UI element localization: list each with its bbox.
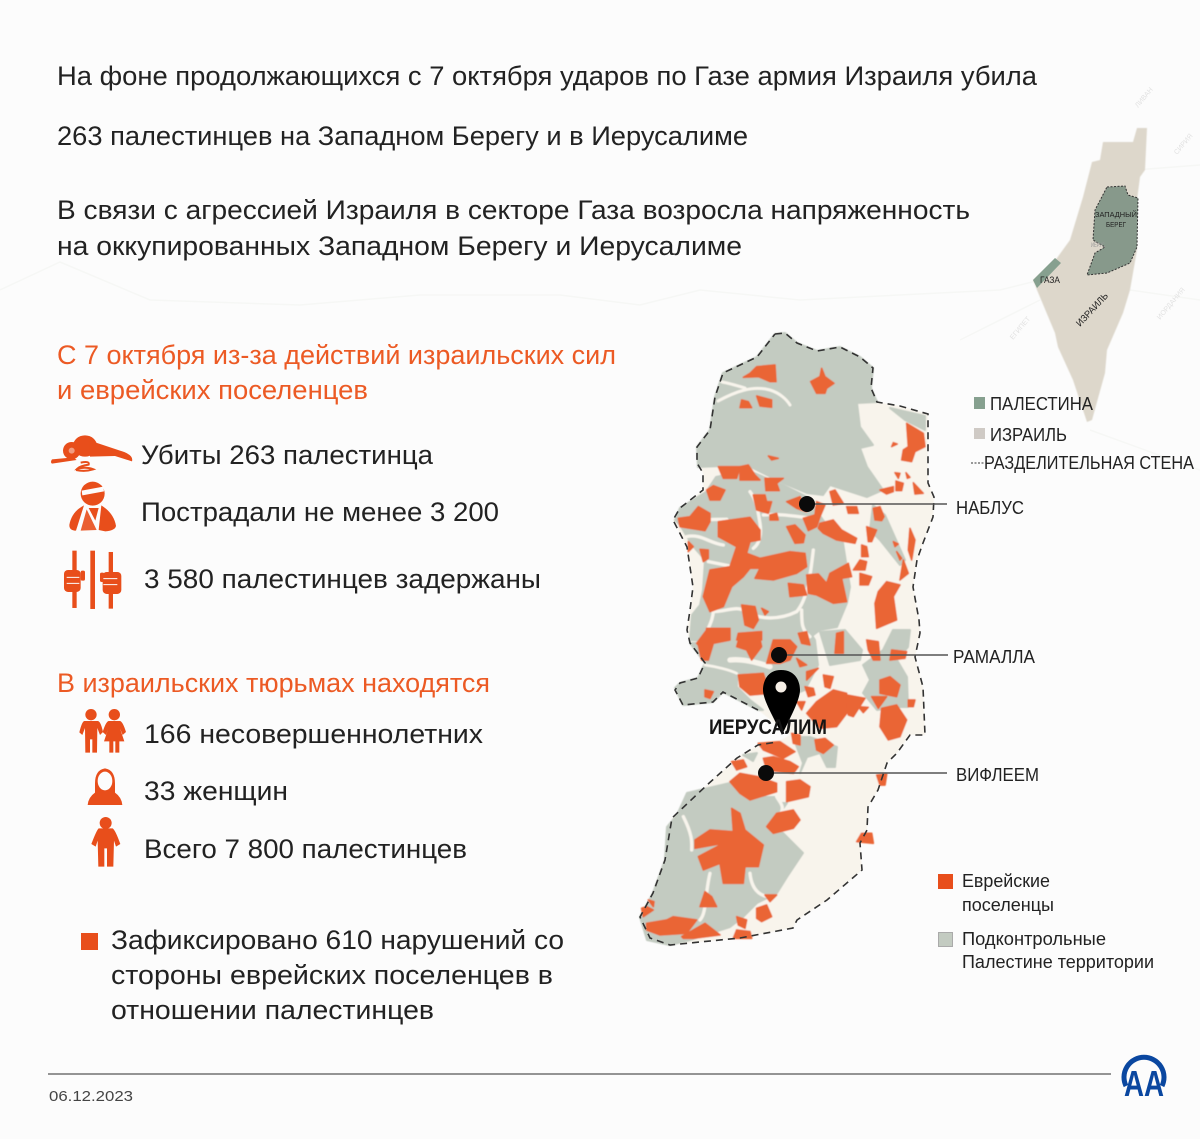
note: settler violations bbox=[81, 925, 564, 1025]
locator map: Israel and Palestine: ГАЗА bbox=[1040, 275, 1060, 285]
legend: settlements: поселенцы bbox=[962, 895, 1054, 915]
map: West Bank bbox=[640, 333, 934, 945]
faint neighbour labels: СИРИЯ bbox=[1173, 133, 1195, 156]
icon: body on the ground bbox=[51, 435, 132, 471]
Israeli settlements: north (coordinates from crop) bbox=[678, 365, 925, 640]
legend: controlled territories: Подконтрольные bbox=[962, 929, 1106, 949]
legend: controlled territories: Палестине территории bbox=[962, 952, 1154, 972]
legend: locator map: ПАЛЕСТИНА bbox=[990, 394, 1093, 414]
legend: controlled territories bbox=[938, 929, 1154, 972]
legend: locator map bbox=[971, 394, 1194, 473]
title bbox=[57, 61, 1038, 151]
legend: settlements: Еврейские bbox=[962, 871, 1050, 891]
intro text: В связи с агрессией Израиля в секторе Газа возросла напряженность bbox=[57, 195, 970, 225]
stat: minors: 166 несовершеннолетних bbox=[144, 719, 484, 749]
icon: woman in headscarf bbox=[88, 768, 122, 805]
title: 263 палестинцев на Западном Берегу и в Иерусалиме bbox=[57, 121, 748, 151]
locator map: Israel and Palestine: ИЗРАИЛЬ bbox=[1074, 291, 1111, 329]
locator map: Israel and Palestine: ИЕРУС. bbox=[1091, 243, 1106, 249]
locator map: Israel and Palestine: БЕРЕГ bbox=[1106, 220, 1126, 229]
stat: detained: 3 580 палестинцев задержаны bbox=[144, 564, 541, 594]
stat: total prisoners: Всего 7 800 палестинцев bbox=[144, 834, 467, 864]
heading: since 7 October bbox=[57, 340, 616, 405]
city marker: Bethlehem bbox=[758, 765, 1039, 785]
legend: settlements bbox=[938, 871, 1054, 915]
locator map: Israel and Palestine: ЗАПАДНЫЙ bbox=[1095, 210, 1137, 219]
city marker: Jerusalem pin bbox=[709, 670, 827, 739]
Israeli settlements: south (coordinates from crop) bbox=[642, 630, 915, 938]
Palestinian-controlled territories bbox=[640, 333, 925, 945]
city marker: Nablus: НАБЛУС bbox=[956, 498, 1024, 518]
icon: children bbox=[79, 709, 126, 753]
heading: since 7 October: С 7 октября из-за действий израильских сил bbox=[57, 340, 616, 370]
note: settler violations: отношении палестинцев bbox=[111, 995, 434, 1025]
stat: injured: Пострадали не менее 3 200 bbox=[141, 497, 499, 527]
date: 06.12.2023 bbox=[49, 1088, 133, 1105]
legend: locator map: ИЗРАИЛЬ bbox=[990, 425, 1067, 445]
separation wall bbox=[640, 333, 934, 945]
faint neighbour labels: ЛИВАН bbox=[1134, 87, 1155, 109]
faint neighbour labels: ИОРДАНИЯ bbox=[1156, 287, 1187, 321]
faint neighbour labels bbox=[1009, 87, 1195, 341]
city marker: Jerusalem pin: ИЕРУСАЛИМ bbox=[709, 716, 827, 739]
city marker: Ramallah bbox=[771, 647, 1035, 667]
stat: women: 33 женщин bbox=[144, 776, 288, 806]
logo: Anadolu Agency bbox=[1124, 1057, 1164, 1104]
heading: since 7 October: и еврейских поселенцев bbox=[57, 375, 368, 405]
locator map: Israel and Palestine bbox=[1033, 128, 1147, 422]
land bbox=[640, 333, 934, 945]
note: settler violations: стороны еврейских поселенцев в bbox=[111, 960, 553, 990]
intro text bbox=[57, 195, 970, 261]
valleys bbox=[683, 382, 813, 920]
city marker: Bethlehem: ВИФЛЕЕМ bbox=[956, 765, 1039, 785]
logo: Anadolu Agency: AA bbox=[1124, 1063, 1164, 1104]
icon: injured person bbox=[69, 482, 116, 531]
intro text: на оккупированных Западном Берегу и Иерусалиме bbox=[57, 231, 742, 261]
title: На фоне продолжающихся с 7 октября ударов по Газе армия Израиля убила bbox=[57, 61, 1038, 91]
city marker: Ramallah: РАМАЛЛА bbox=[953, 647, 1035, 667]
heading: in Israeli prisons: В израильских тюрьмах находятся bbox=[57, 668, 490, 698]
icon: person bbox=[91, 817, 120, 867]
stat: killed: Убиты 263 палестинца bbox=[141, 440, 434, 470]
icon: hands on prison bars bbox=[64, 551, 121, 609]
city marker: Nablus bbox=[799, 496, 1024, 518]
note: settler violations: Зафиксировано 610 нарушений со bbox=[111, 925, 564, 955]
faint neighbour labels: ЕГИПЕТ bbox=[1009, 315, 1033, 341]
